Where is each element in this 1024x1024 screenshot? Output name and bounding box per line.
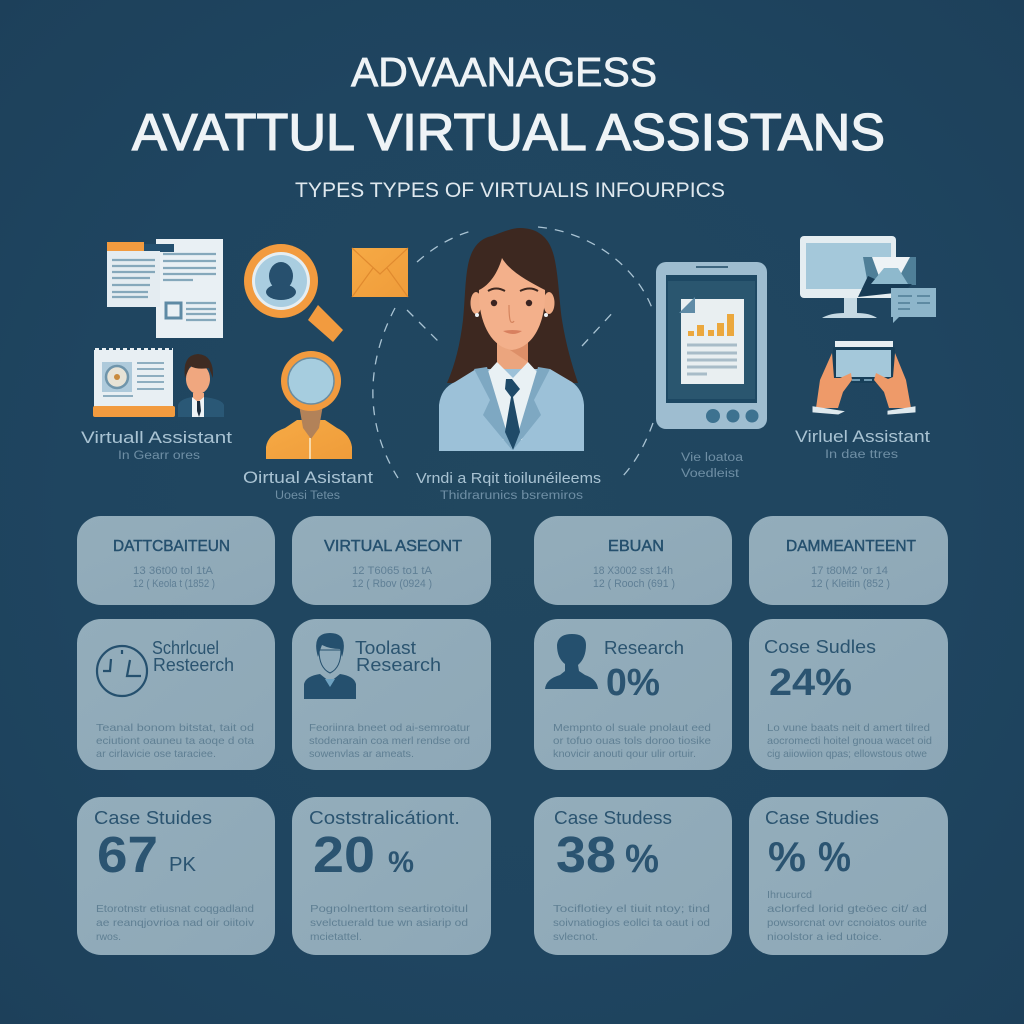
icon: magnifier with user [244, 244, 343, 342]
panel: toolast research card: stodenarain coa merl rendse ord [309, 735, 470, 747]
title line 2: AVATTUL VIRTUAL ASSISTANS [132, 104, 885, 162]
panel: 38% card [534, 797, 732, 955]
label: virtual assistant right [795, 427, 930, 461]
panel: 20% card: Coststralicátiont. [309, 808, 460, 828]
panel: research 0% card: Research [604, 638, 684, 658]
panel: percent symbols card: powsorcnat ovr ccnoiatos ourite [767, 917, 927, 929]
panel: summary card 3: 18 X3002 sst 14h [593, 565, 673, 577]
panel: toolast research card: Toolast [355, 638, 416, 658]
label: central caption: Vrndi a Rqit tioilunéileems [416, 470, 601, 487]
icon: man avatar [304, 633, 356, 699]
panel: percent symbols card: Ihrucurcd [767, 889, 812, 901]
panel: 38% card: Case Studess [554, 808, 672, 828]
label: virtual assistant left: Virtuall Assistant [81, 428, 232, 447]
label: virtual assistant right: In dae ttres [825, 449, 898, 461]
panel: 67 PK card: PK [169, 854, 197, 876]
panel: summary card 1 [77, 516, 275, 605]
label: tablet caption: Voedleist [681, 468, 740, 480]
label: tablet caption: Vie loatoa [681, 452, 744, 464]
panel: 24% case studies card: cig aiiowiion qpas; ellowstous otwe [767, 748, 927, 760]
dashed connector arcs [373, 227, 653, 478]
panel: 67 PK card [77, 797, 275, 955]
icon: tablet with report [656, 262, 767, 429]
panel: research 0% card: Mempnto ol suale pnolaut eed [553, 722, 711, 734]
panel: summary card 3: EBUAN [608, 538, 664, 555]
face [479, 258, 545, 350]
panel: clock research card: Teanal bonom bitstat, tait od [96, 722, 254, 734]
label: virtual assistant middle: Uoesi Tetes [275, 490, 340, 502]
panel: toolast research card: Research [356, 655, 441, 675]
panel: clock research card: ar cirlavicie ose taraciee. [96, 748, 216, 760]
panel: 38% card: % [625, 837, 659, 881]
panel: toolast research card: sowenvlas ar ameats. [309, 748, 414, 760]
panel: 38% card: Tociflotiey el tiuit ntoy; tind [553, 903, 710, 915]
panel: research 0% card: knovicir anouti qour ulir ortuir. [553, 748, 696, 760]
central figure: woman in blazer [439, 228, 584, 451]
title block [132, 49, 885, 202]
bar chart on report [688, 314, 734, 336]
panel: 20% card: % [388, 846, 414, 879]
panel: 24% case studies card: Lo vune baats neit d amert tilred [767, 722, 930, 734]
panel: toolast research card [292, 619, 491, 770]
blazer [439, 369, 584, 451]
panel: clock research card: Schrlcuel [152, 638, 219, 658]
panel: summary card 4: 17 t80M2 'or 14 [811, 565, 888, 577]
hair [447, 228, 578, 383]
panel: 24% case studies card [749, 619, 948, 770]
panel: percent symbols card: % [818, 833, 851, 880]
icon: hands holding device [814, 341, 914, 413]
panel: toolast research card: Feoriinra bneet od ai-semroatur [309, 722, 471, 734]
icon: monitor with envelope and chat [800, 236, 936, 323]
panel: summary card 1: 12 ( Keola t (1852 ) [133, 578, 215, 590]
panel: summary card 4 [749, 516, 948, 605]
label: virtual assistant right: Virluel Assistant [795, 427, 930, 446]
panel: summary card 4: DAMMEANTEENT [786, 538, 916, 555]
label: central caption [416, 470, 601, 502]
label: virtual assistant middle: Oirtual Asistant [243, 468, 373, 487]
panel: summary card 2: 12 ( Rbov (0924 ) [352, 578, 432, 590]
panel: 67 PK card: 67 [97, 826, 158, 883]
panel: summary card 4: 12 ( Kleitin (852 ) [811, 578, 890, 590]
panel: 24% case studies card: aocromecti hoitel gnoua wacet oid [767, 735, 932, 747]
label: tablet caption [681, 452, 744, 480]
icon: calendar and man [93, 350, 224, 417]
panel: 20% card: Pognolnerttom seartirotoitul [310, 903, 468, 915]
icon: person silhouette [545, 634, 598, 689]
panel: 67 PK card: Case Stuides [94, 808, 212, 828]
label: virtual assistant left: In Gearr ores [118, 450, 200, 462]
ears [470, 292, 482, 314]
neck [497, 335, 528, 385]
subtitle: TYPES TYPES OF VIRTUALIS INFOURPICS [295, 179, 725, 202]
panel: research 0% card: 0% [606, 662, 660, 704]
icon: envelope [352, 248, 408, 297]
panel: percent symbols card: Case Studies [765, 808, 879, 828]
panel: summary card 1: 13 36t00 tol 1tA [133, 565, 214, 577]
panel: percent symbols card: % [768, 833, 806, 880]
icon: documents [107, 239, 223, 338]
panel: 20% card: mcietattel. [310, 931, 362, 943]
panel: 20% card [292, 797, 491, 955]
lapels [474, 367, 512, 450]
label: virtual assistant left [81, 428, 232, 462]
facial features [488, 288, 538, 291]
panel: 38% card: soivnatiogios eollci ta oaut i od [553, 917, 710, 929]
icon: clock [97, 646, 147, 696]
panel: clock research card [77, 619, 275, 770]
panel: 24% case studies card: 24% [769, 662, 852, 704]
label: virtual assistant middle [243, 468, 373, 502]
panel: percent symbols card: aclorfed lorid gteöec cit/ ad [767, 903, 927, 915]
shirt collar [487, 362, 538, 440]
panel: summary card 2: 12 T6065 to1 tA [352, 565, 433, 577]
panel: percent symbols card [749, 797, 948, 955]
panel: summary card 3 [534, 516, 732, 605]
panel: research 0% card: or tofuo ouas tols doroo tiosike [553, 735, 711, 747]
panel: 20% card: 20 [313, 826, 375, 883]
panel: 24% case studies card: Cose Sudles [764, 637, 876, 657]
panel: summary card 1: DATTCBAITEUN [113, 538, 230, 555]
panel: clock research card: eciutiont oauneu ta aoqe d ota [96, 735, 254, 747]
tie [505, 379, 520, 450]
label: central caption: Thidrarunics bsremiros [440, 490, 583, 502]
panel: percent symbols card: nioolstor a ied utoice. [767, 931, 882, 943]
panel: research 0% card [534, 619, 732, 770]
panel: 67 PK card: rwos. [96, 931, 121, 943]
panel: 38% card: svlecnot. [553, 931, 598, 943]
panel: summary card 3: 12 ( Rooch (691 ) [593, 578, 675, 590]
panel: 20% card: svelctuerald tue wn asiarip od [310, 917, 468, 929]
panel: 38% card: 38 [556, 826, 616, 883]
panel: summary card 2: VIRTUAL ASEONT [324, 538, 462, 555]
panel: summary card 2 [292, 516, 491, 605]
icon: magnifier head person [266, 351, 352, 459]
title line 1: ADVAANAGESS [351, 49, 657, 95]
panel: clock research card: Resteerch [153, 655, 234, 675]
panel: 67 PK card: Etorotnstr etiusnat coqgadland [96, 903, 254, 915]
panel: 67 PK card: ae reanqjovrioa nad oir oiitoiv [96, 917, 255, 929]
